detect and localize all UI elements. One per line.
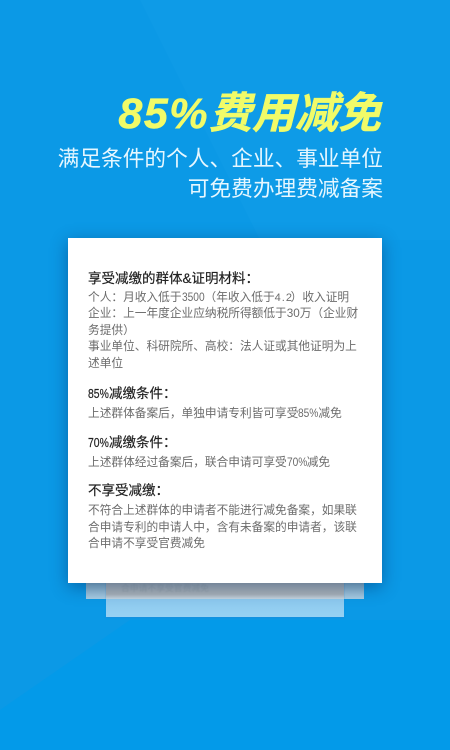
main white card [68,238,382,583]
section: 70% heading: 70% [88,435,109,450]
section: eligible groups heading: 享受减缴的群体&证明材料： [88,271,259,286]
section: eligible groups text: 4.2 [275,292,293,304]
subtitle: 可免费办理费减备案 [188,176,383,201]
section: eligible groups text: 个人：月收入低于 （年收入低于 ）收入证明 [88,290,349,304]
stacked back sheet 2 [86,560,364,599]
ghost text: 合申请不享受官费减免 [121,583,209,593]
section: 70% heading: 减缴条件： [109,435,176,450]
section: no reduction text: 合申请不享受官费减免 [88,537,205,550]
section: 85% text: 85% [298,406,319,420]
section: no reduction text: 合申请专利的申请人中，含有未备案的申请者，该联 [88,521,357,534]
section: 70% text: 70% [287,456,307,468]
section: eligible groups text: 企业：上一年度企业应纳税所得额低于30万（企业财 [88,307,358,320]
section: 85% heading: 85% [88,386,109,401]
title: 85%费用减免 [118,90,381,138]
section: eligible groups text: 事业单位、科研院所、高校：法人证或其他证明为上 [88,340,357,353]
section: 85% text: 上述群体备案后，单独申请专利皆可享受 减免 [88,406,342,420]
section: no reduction heading: 不享受减缴： [88,483,169,498]
section: eligible groups text: 述单位 [88,357,123,370]
section: no reduction text [88,504,357,550]
section: eligible groups text [88,290,358,370]
section: 85% heading: 减缴条件： [109,386,176,401]
subtitle [58,146,383,201]
section: no reduction text: 不符合上述群体的申请者不能进行减免备案，如果联 [88,504,357,517]
section: 70% text: 上述群体经过备案后，联合申请可享受 减免 [88,456,330,468]
subtitle: 满足条件的个人、企业、事业单位 [58,146,383,171]
stacked back sheet 3 [106,560,344,617]
section: eligible groups text: 3500 [182,290,204,304]
section: eligible groups text: 务提供） [88,324,135,337]
